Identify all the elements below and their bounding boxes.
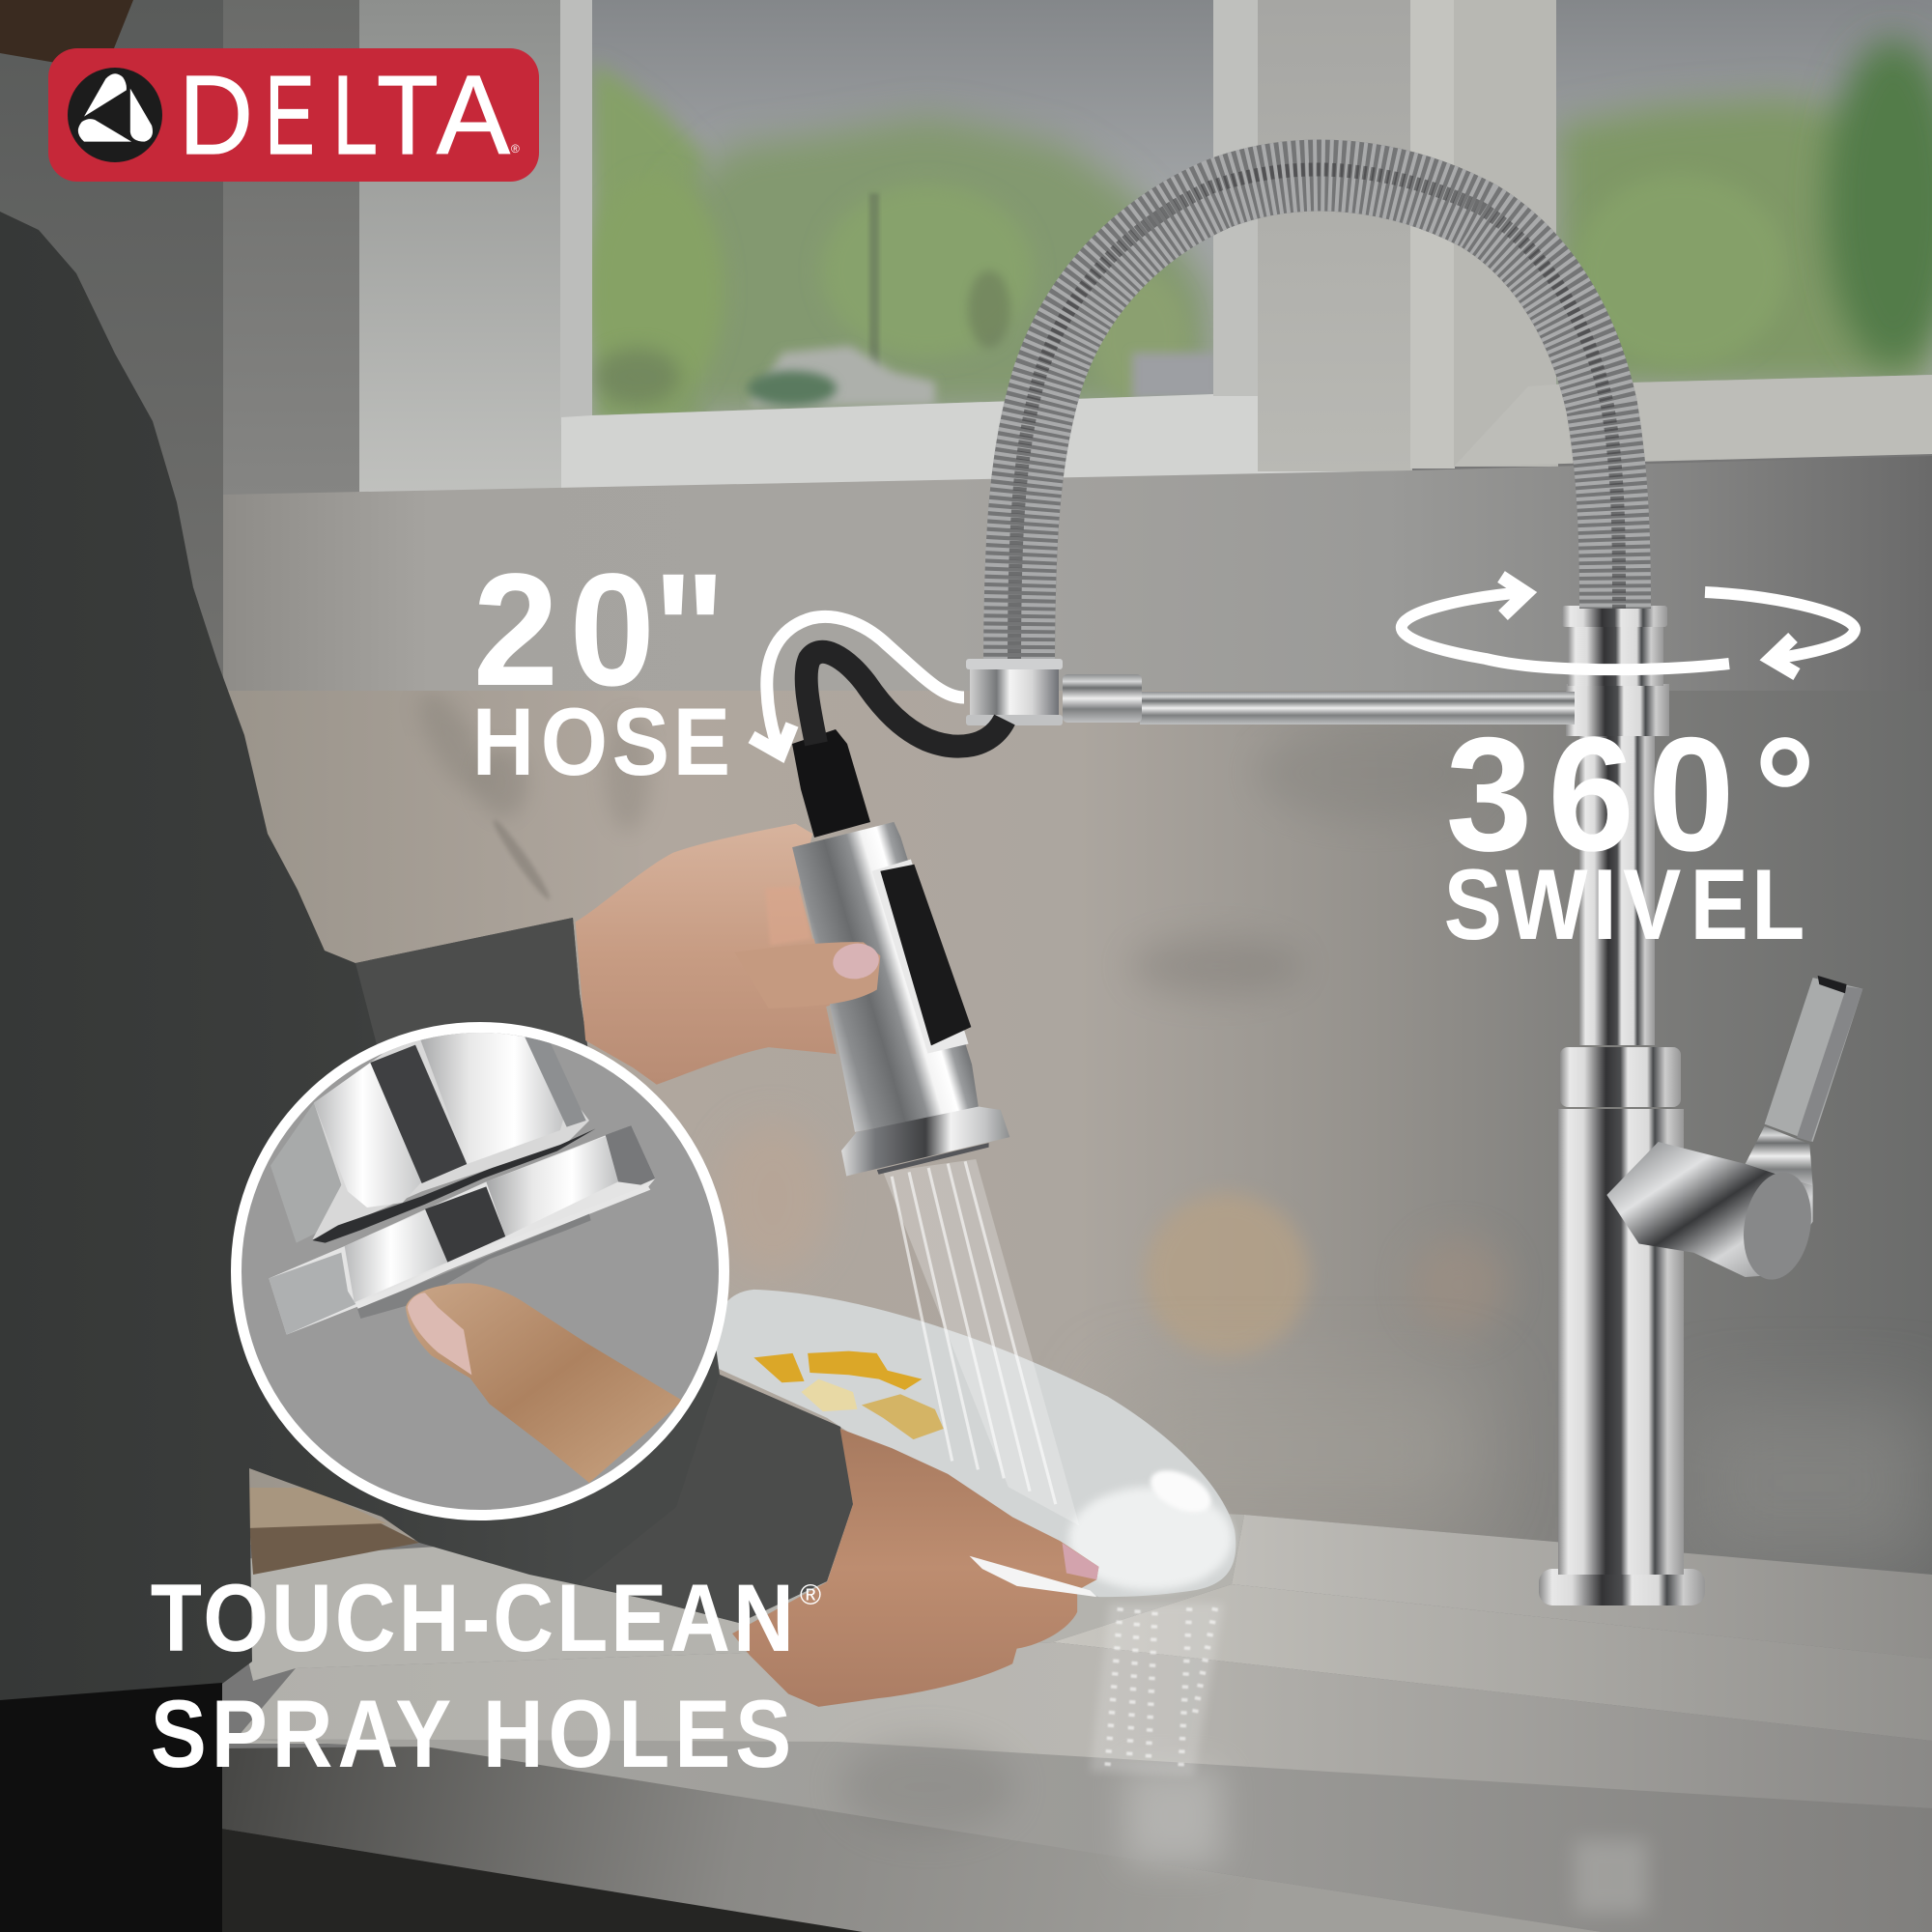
thumb nail — [831, 941, 881, 981]
faucet column and base — [1539, 606, 1705, 1605]
registered mark: ® — [800, 1579, 821, 1611]
callout: 20 inch hose — [472, 541, 964, 795]
sill below right window — [1454, 375, 1932, 467]
arrow: swivel left arc — [1402, 577, 1729, 669]
arrow: swivel right arc — [1705, 592, 1855, 674]
inset: fingertip — [406, 1283, 683, 1483]
reflections in basin — [840, 1739, 1647, 1913]
cutting board — [246, 1488, 419, 1575]
callout: 360 degree swivel — [1402, 577, 1855, 960]
finger nail — [1063, 1543, 1098, 1579]
inset: rubber spray nozzles — [357, 1214, 591, 1319]
spray head — [792, 822, 1009, 1176]
chrome body — [792, 822, 979, 1132]
water spray from head — [883, 1159, 1079, 1525]
inset: bright cylinder left — [314, 1063, 422, 1208]
black trigger — [880, 865, 971, 1045]
sink and countertop — [222, 1507, 1932, 1932]
circular inset: touch-clean spray holes — [236, 1028, 724, 1515]
wall column beside window — [223, 0, 360, 495]
label: touch-clean: TOUCH-CLEAN — [151, 1565, 794, 1671]
logo wordmark: E — [265, 52, 315, 178]
hair at top left — [0, 0, 133, 63]
dark trousers — [0, 1683, 222, 1932]
window frame left — [560, 0, 593, 425]
window pane right with trees — [1556, 0, 1932, 386]
spray face rim — [841, 1107, 1009, 1176]
inset: rim bottom highlight — [355, 1185, 650, 1311]
faucet handle — [1606, 976, 1862, 1295]
window frame and sill — [561, 0, 1558, 493]
plate — [713, 1290, 1236, 1597]
thumb on spray head — [734, 941, 881, 1009]
nozzles — [877, 1143, 989, 1175]
heading: 360 degrees: 360° — [1446, 703, 1816, 885]
inset: translucent ribbed side — [270, 1103, 341, 1243]
inset: dark sweep reflection — [312, 1128, 596, 1243]
trigger frame — [872, 859, 969, 1053]
marble backsplash — [223, 683, 1932, 1575]
upper hand — [576, 824, 880, 1085]
logo emblem — [68, 68, 162, 162]
upper sleeve lighter knit — [355, 918, 589, 1082]
inset: rim right end — [606, 1125, 655, 1185]
label: swivel: SWIVEL — [1444, 848, 1804, 960]
upper wall band — [223, 456, 1932, 692]
inset: glass edge of cylinder — [524, 1034, 586, 1127]
plate rim under fingers — [970, 1556, 1096, 1597]
food scraps — [753, 1351, 944, 1439]
woman's body in sweater — [0, 212, 853, 1702]
spring spout — [1014, 169, 1619, 676]
callout: touch-clean label — [151, 1565, 821, 1787]
inset: dark reflection band upper — [370, 1045, 467, 1183]
basin floor — [232, 1739, 1932, 1932]
heading: 20 inch: 20" — [473, 541, 725, 720]
inset: rim bright left — [345, 1210, 447, 1302]
logo wordmark: D — [179, 52, 253, 178]
window left reveal — [359, 0, 561, 495]
inset: bright cylinder right — [417, 1031, 567, 1164]
logo wordmark: T — [377, 53, 439, 178]
registered mark: ® — [511, 142, 520, 156]
lower hand holding plate — [732, 1429, 1098, 1707]
label: hose: HOSE — [472, 689, 730, 795]
worktop front nose — [1053, 1584, 1932, 1741]
label: spray holes: SPRAY HOLES — [151, 1681, 791, 1787]
arrow: hose reach — [752, 616, 964, 753]
inset: cylinder base — [312, 1031, 589, 1239]
black hose connector — [792, 729, 870, 838]
hose connector collar — [966, 659, 1063, 725]
worktop back surface — [1232, 1515, 1932, 1659]
logo: Delta badge — [48, 48, 539, 182]
inset: rim left ribbed end — [269, 1253, 355, 1335]
front rim — [222, 1747, 1602, 1932]
worktop left — [224, 1507, 1244, 1681]
logo wordmark: L — [332, 52, 378, 178]
inset: fingernail — [408, 1293, 471, 1375]
window pane left with trees — [589, 0, 1219, 425]
inset: rim base — [269, 1125, 655, 1335]
lower sleeve cuff lighter knit — [580, 1375, 853, 1623]
inset: rim dark band — [425, 1186, 505, 1263]
logo wordmark: A — [437, 53, 510, 178]
dark cabinet — [222, 1829, 863, 1932]
left wall — [0, 0, 224, 966]
inset: rim bright right — [486, 1137, 618, 1236]
basin back wall — [232, 1642, 1932, 1808]
horizontal spout bar — [1063, 674, 1575, 724]
water falling from plate — [1091, 1604, 1224, 1776]
black braided hose — [807, 652, 1005, 747]
logo wordmark — [179, 52, 510, 178]
